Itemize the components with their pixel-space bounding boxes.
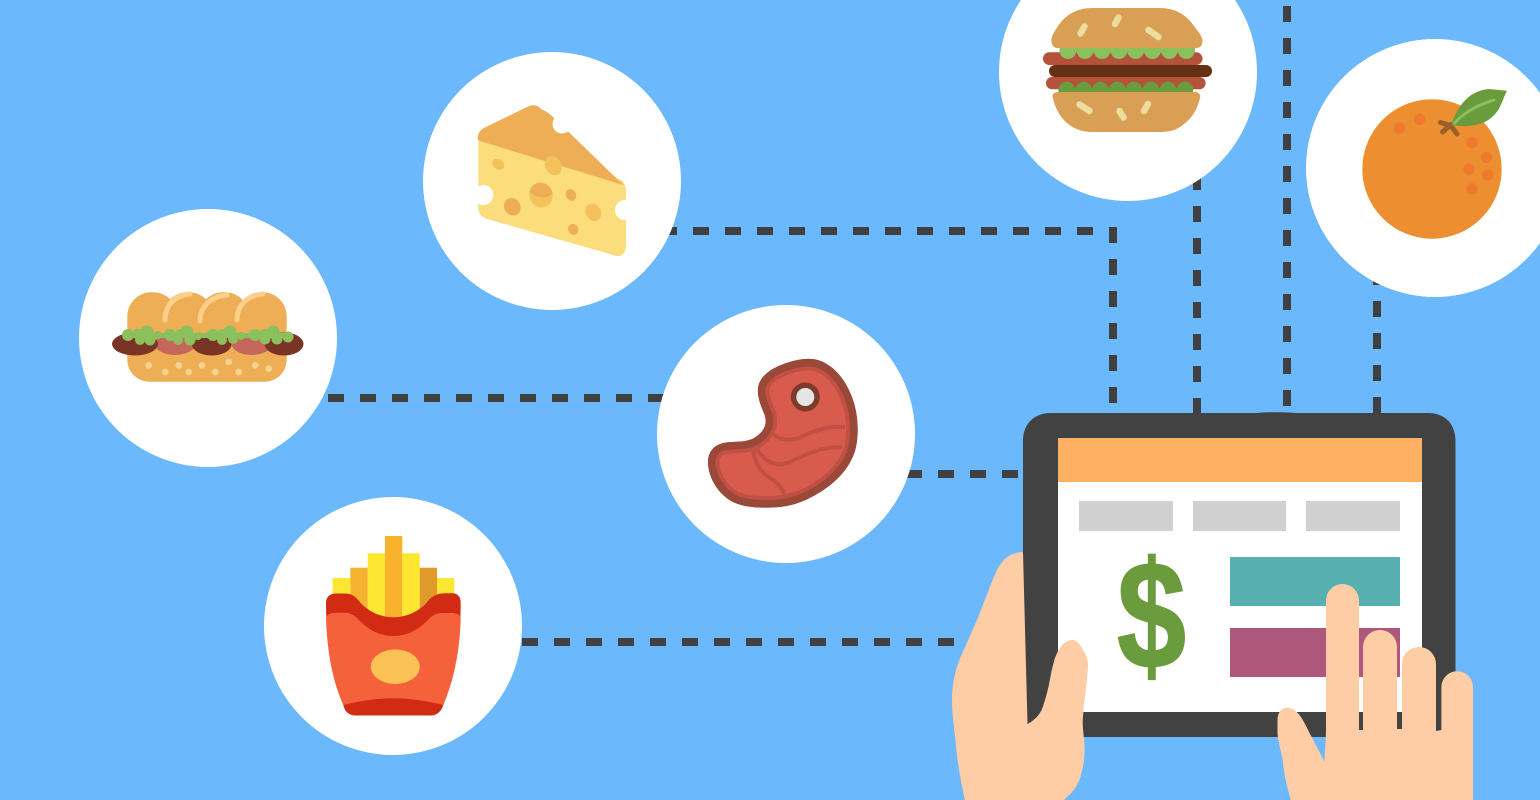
icon: sandwich bbox=[112, 292, 304, 382]
grey tab 3 bbox=[1306, 501, 1400, 531]
teal button bbox=[1230, 557, 1400, 606]
right hand bbox=[1278, 584, 1473, 800]
tablet screen bbox=[1058, 438, 1422, 712]
icon: steak bbox=[708, 359, 858, 508]
circle: cheese bbox=[423, 52, 681, 310]
icon: orange bbox=[1362, 89, 1507, 239]
screen header bbox=[1058, 438, 1422, 482]
circle: steak bbox=[657, 305, 915, 563]
circle: orange bbox=[1306, 39, 1540, 297]
grey tab 2 bbox=[1193, 501, 1286, 531]
icon: burger bbox=[1043, 8, 1212, 132]
tablet bbox=[1023, 412, 1456, 737]
circle: burger bbox=[999, 0, 1257, 201]
dollar sign: $ bbox=[1117, 530, 1186, 701]
grey tab 1 bbox=[1079, 501, 1173, 531]
circle: sandwich bbox=[79, 209, 337, 467]
icon: fries bbox=[326, 536, 461, 716]
icon: cheese bbox=[473, 105, 635, 256]
dashed connector lines bbox=[328, 6, 1377, 642]
purple button bbox=[1230, 628, 1400, 677]
circle: fries bbox=[264, 497, 522, 755]
left hand bbox=[952, 552, 1088, 800]
tablet body bbox=[1023, 412, 1456, 737]
